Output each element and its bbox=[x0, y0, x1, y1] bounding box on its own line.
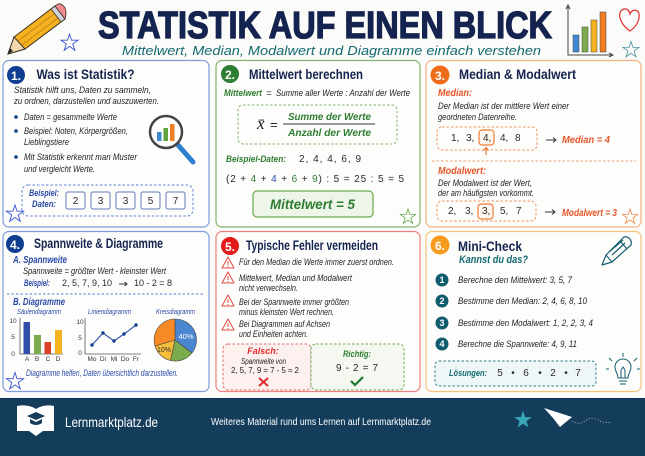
pie chart: 40% bbox=[178, 332, 194, 341]
median label: Median: bbox=[438, 88, 472, 99]
bar chart: C bbox=[46, 356, 51, 363]
example: 2, 5, 7, 9, 10 bbox=[62, 278, 112, 288]
median result: Median = 4 bbox=[562, 134, 610, 146]
definition bbox=[224, 88, 410, 99]
line chart: Mo bbox=[87, 356, 97, 363]
modalwert text: Der Modalwert ist der Wert, bbox=[438, 178, 532, 189]
warning icons bbox=[222, 257, 234, 330]
line chart: 5 bbox=[78, 335, 82, 342]
modalwert row: 3, bbox=[465, 206, 473, 217]
median text bbox=[438, 101, 570, 123]
right box: 9 - 2 = 7 bbox=[336, 363, 378, 374]
icon: magnifier bbox=[150, 116, 193, 162]
solutions box: 6 bbox=[523, 368, 529, 379]
bar chart: Säulendiagramm bbox=[17, 309, 61, 316]
heading: Median & Modalwert bbox=[459, 66, 576, 82]
line chart: 10 bbox=[76, 319, 84, 326]
intro text bbox=[13, 85, 159, 107]
line chart: Di bbox=[100, 356, 106, 363]
bar chart: 0 bbox=[11, 351, 15, 358]
arrow up bbox=[484, 148, 488, 155]
tips list bbox=[239, 257, 394, 340]
solutions box bbox=[435, 361, 596, 386]
modalwert label: Modalwert: bbox=[438, 166, 486, 177]
modalwert row: 2, bbox=[448, 206, 456, 217]
solutions box: 5 bbox=[497, 368, 503, 379]
icon: pencil bbox=[8, 4, 66, 54]
number badge 3 bbox=[430, 66, 450, 84]
median text: geordneten Datenreihe. bbox=[438, 112, 517, 123]
example data: 2, 4, 4, 6, 9 bbox=[299, 154, 361, 165]
bar chart: D bbox=[56, 356, 61, 363]
example data: 5 bbox=[148, 196, 154, 207]
median row: 8 bbox=[515, 133, 521, 144]
formula box: = bbox=[270, 117, 278, 132]
question list: Bestimme den Median: 2, 4, 6, 8, 10 bbox=[458, 296, 588, 307]
definition: Mittelwert bbox=[224, 88, 263, 98]
bar chart: 5 bbox=[11, 334, 15, 341]
number badge 4: 4. bbox=[10, 238, 20, 252]
bullet list: Mit Statistik erkennt man Muster bbox=[24, 152, 138, 163]
icon: blue star bbox=[61, 34, 78, 50]
heading: Typische Fehler vermeiden bbox=[246, 237, 378, 253]
tips list: und Einheiten achten. bbox=[239, 329, 308, 340]
subheading B: B. Diagramme bbox=[13, 297, 65, 308]
bar chart: A bbox=[25, 356, 30, 363]
icon: bar chart bbox=[566, 5, 613, 57]
question list: Bestimme den Modalwert: 1, 2, 2, 3, 4 bbox=[458, 318, 593, 329]
icon: teal star bbox=[516, 412, 530, 426]
tips list: Für den Median die Werte immer zuerst ordnen. bbox=[239, 257, 394, 268]
line chart: Liniendiagramm bbox=[88, 309, 131, 316]
pie chart bbox=[154, 309, 197, 361]
subheading A: A. Spannweite bbox=[12, 255, 67, 266]
tips list: Bei der Spannweite immer größten bbox=[239, 297, 349, 308]
tips list: nicht verwechseln. bbox=[239, 283, 298, 294]
wrong box: Falsch: bbox=[247, 346, 279, 356]
solutions box: 2 bbox=[550, 368, 556, 379]
modalwert text: der am häufigsten vorkommt. bbox=[438, 188, 534, 199]
solutions box: • bbox=[511, 368, 515, 379]
question list: 4 bbox=[439, 339, 445, 349]
example data: Beispiel: bbox=[29, 188, 59, 198]
formula: Spannweite = größter Wert - kleinster Wert bbox=[23, 266, 166, 277]
solutions box: Lösungen: bbox=[449, 368, 487, 378]
definition: Summe aller Werte : Anzahl der Werte bbox=[276, 88, 410, 99]
subheading: Kannst du das? bbox=[459, 254, 528, 266]
median row: 1, bbox=[451, 133, 459, 144]
calculation: (2 + 4 + 4 + 6 + 9) : 5 = 25 : 5 = 5 bbox=[226, 174, 404, 185]
heading: Mittelwert berechnen bbox=[249, 66, 363, 82]
wrong box bbox=[223, 344, 311, 390]
example data bbox=[226, 154, 361, 165]
example data: 3 bbox=[123, 196, 129, 207]
bullet list: Lieblingstiere bbox=[24, 137, 69, 148]
icon: star bbox=[6, 205, 24, 221]
median row bbox=[437, 127, 537, 150]
title: STATISTIK AUF EINEN BLICK bbox=[98, 5, 552, 47]
example: 10 - 2 = 8 bbox=[134, 278, 172, 288]
median row: 4, bbox=[483, 133, 491, 144]
result box: Mittelwert = 5 bbox=[270, 196, 355, 212]
result box bbox=[253, 191, 373, 217]
line chart: 0 bbox=[78, 350, 82, 357]
icon: star bbox=[622, 209, 638, 223]
pie chart: Kreisdiagramm bbox=[156, 309, 195, 316]
icon: pencil bbox=[602, 237, 631, 265]
question list: 1 bbox=[439, 275, 445, 285]
median row: 3, bbox=[466, 133, 474, 144]
footer bbox=[0, 398, 645, 456]
bar chart: B bbox=[35, 356, 39, 363]
example: Beispiel: bbox=[24, 278, 50, 288]
number badge 6: 6. bbox=[435, 239, 445, 253]
bullet list: und vergleicht Werte. bbox=[24, 164, 95, 175]
bar chart: 10 bbox=[9, 318, 17, 325]
example data: Daten: bbox=[32, 199, 56, 209]
question list: 2 bbox=[439, 296, 445, 306]
panel: Median und Modalwert bbox=[426, 60, 641, 227]
modalwert result: Modalwert = 3 bbox=[562, 208, 617, 219]
wrong box: Spannweite von bbox=[241, 357, 286, 366]
formula box: x̄ bbox=[256, 114, 265, 133]
modalwert row bbox=[437, 201, 536, 221]
intro text: Statistik hilft uns, Daten zu sammeln, bbox=[14, 85, 151, 96]
median row: 4, bbox=[500, 133, 508, 144]
tips list: Bei Diagrammen auf Achsen bbox=[239, 319, 330, 330]
icon: star bbox=[400, 209, 416, 223]
formula box: Summe der Werte bbox=[288, 111, 371, 123]
modalwert text bbox=[438, 178, 534, 199]
number badge 1: 1. bbox=[11, 69, 21, 83]
icon: star bbox=[6, 372, 24, 389]
icon: heart bbox=[620, 9, 639, 31]
example data: 2 bbox=[73, 196, 79, 207]
logo text: Lernmarktplatz.de bbox=[65, 414, 158, 430]
bullet list: Daten = gesammelte Werte bbox=[24, 112, 117, 123]
icon: light bulb bbox=[606, 353, 640, 384]
question list: 3 bbox=[439, 318, 445, 328]
example bbox=[24, 278, 172, 288]
panel: Spannweite und Diagramme bbox=[3, 232, 209, 392]
number badge 2 bbox=[221, 65, 239, 83]
panel: Was ist Statistik bbox=[3, 60, 209, 227]
header bbox=[8, 4, 639, 58]
pie chart: 10% bbox=[157, 347, 171, 354]
solutions box: • bbox=[564, 368, 568, 379]
median text: Der Median ist der mittlere Wert einer bbox=[438, 101, 570, 112]
panel: Mittelwert berechnen bbox=[216, 60, 420, 227]
icon: paper plane bbox=[544, 408, 611, 427]
line chart: Mi bbox=[111, 356, 117, 363]
caption: Diagramme helfen, Daten übersichtlich darzustellen. bbox=[26, 368, 178, 378]
number badge 4 bbox=[6, 235, 24, 253]
bar chart bbox=[9, 309, 63, 363]
example data: 7 bbox=[173, 196, 179, 207]
example data: Beispiel-Daten: bbox=[226, 154, 286, 165]
formula box bbox=[238, 105, 397, 144]
number badge 3: 3. bbox=[435, 69, 445, 83]
tips list: Mittelwert, Median und Modalwert bbox=[239, 273, 352, 284]
panel: Typische Fehler vermeiden bbox=[216, 232, 420, 392]
line chart: Do bbox=[121, 356, 130, 363]
line chart bbox=[76, 309, 141, 363]
right box bbox=[311, 344, 404, 390]
number badge 5 bbox=[221, 237, 239, 255]
tips list: minus kleinsten Wert rechnen. bbox=[239, 307, 334, 318]
example data: 3 bbox=[98, 196, 104, 207]
number badge 1 bbox=[7, 66, 25, 84]
definition: = bbox=[266, 88, 272, 99]
heading: Was ist Statistik? bbox=[36, 66, 134, 82]
line chart: Fr bbox=[133, 356, 140, 363]
arrow bbox=[545, 210, 555, 214]
number badge 5: 5. bbox=[225, 240, 235, 254]
formula box: Anzahl der Werte bbox=[287, 127, 371, 139]
logo icon bbox=[17, 405, 54, 436]
panel: Mini-Check bbox=[426, 232, 641, 392]
question list: Berechne den Mittelwert: 3, 5, 7 bbox=[458, 275, 573, 286]
modalwert row: 3, bbox=[482, 206, 490, 217]
arrow bbox=[546, 138, 556, 142]
question list: Berechne die Spannweite: 4, 9, 11 bbox=[458, 339, 577, 350]
number badge 6 bbox=[430, 236, 450, 254]
modalwert row: 5, bbox=[500, 206, 508, 217]
wrong box: 2, 5, 7, 9 = 7 - 5 = 2 bbox=[231, 366, 300, 375]
heading: Spannweite & Diagramme bbox=[34, 235, 163, 251]
footer text: Weiteres Material rund ums Lernen auf Lernmarktplatz.de bbox=[211, 417, 431, 428]
right box: Richtig: bbox=[343, 349, 371, 359]
modalwert row: 7 bbox=[516, 206, 522, 217]
solutions box: • bbox=[538, 368, 542, 379]
heading: Mini-Check bbox=[458, 238, 522, 254]
solutions box: 7 bbox=[575, 368, 581, 379]
icon: teal star bbox=[623, 42, 639, 57]
bullet list bbox=[14, 112, 138, 175]
subtitle: Mittelwert, Median, Modalwert und Diagramme einfach verstehen bbox=[122, 43, 541, 58]
bullet list: Beispiel: Noten, Körpergrößen, bbox=[24, 126, 128, 137]
number badge 2: 2. bbox=[225, 68, 235, 82]
example data bbox=[22, 185, 193, 216]
intro text: zu ordnen, darzustellen und auszuwerten. bbox=[13, 96, 159, 107]
question list bbox=[436, 274, 593, 350]
